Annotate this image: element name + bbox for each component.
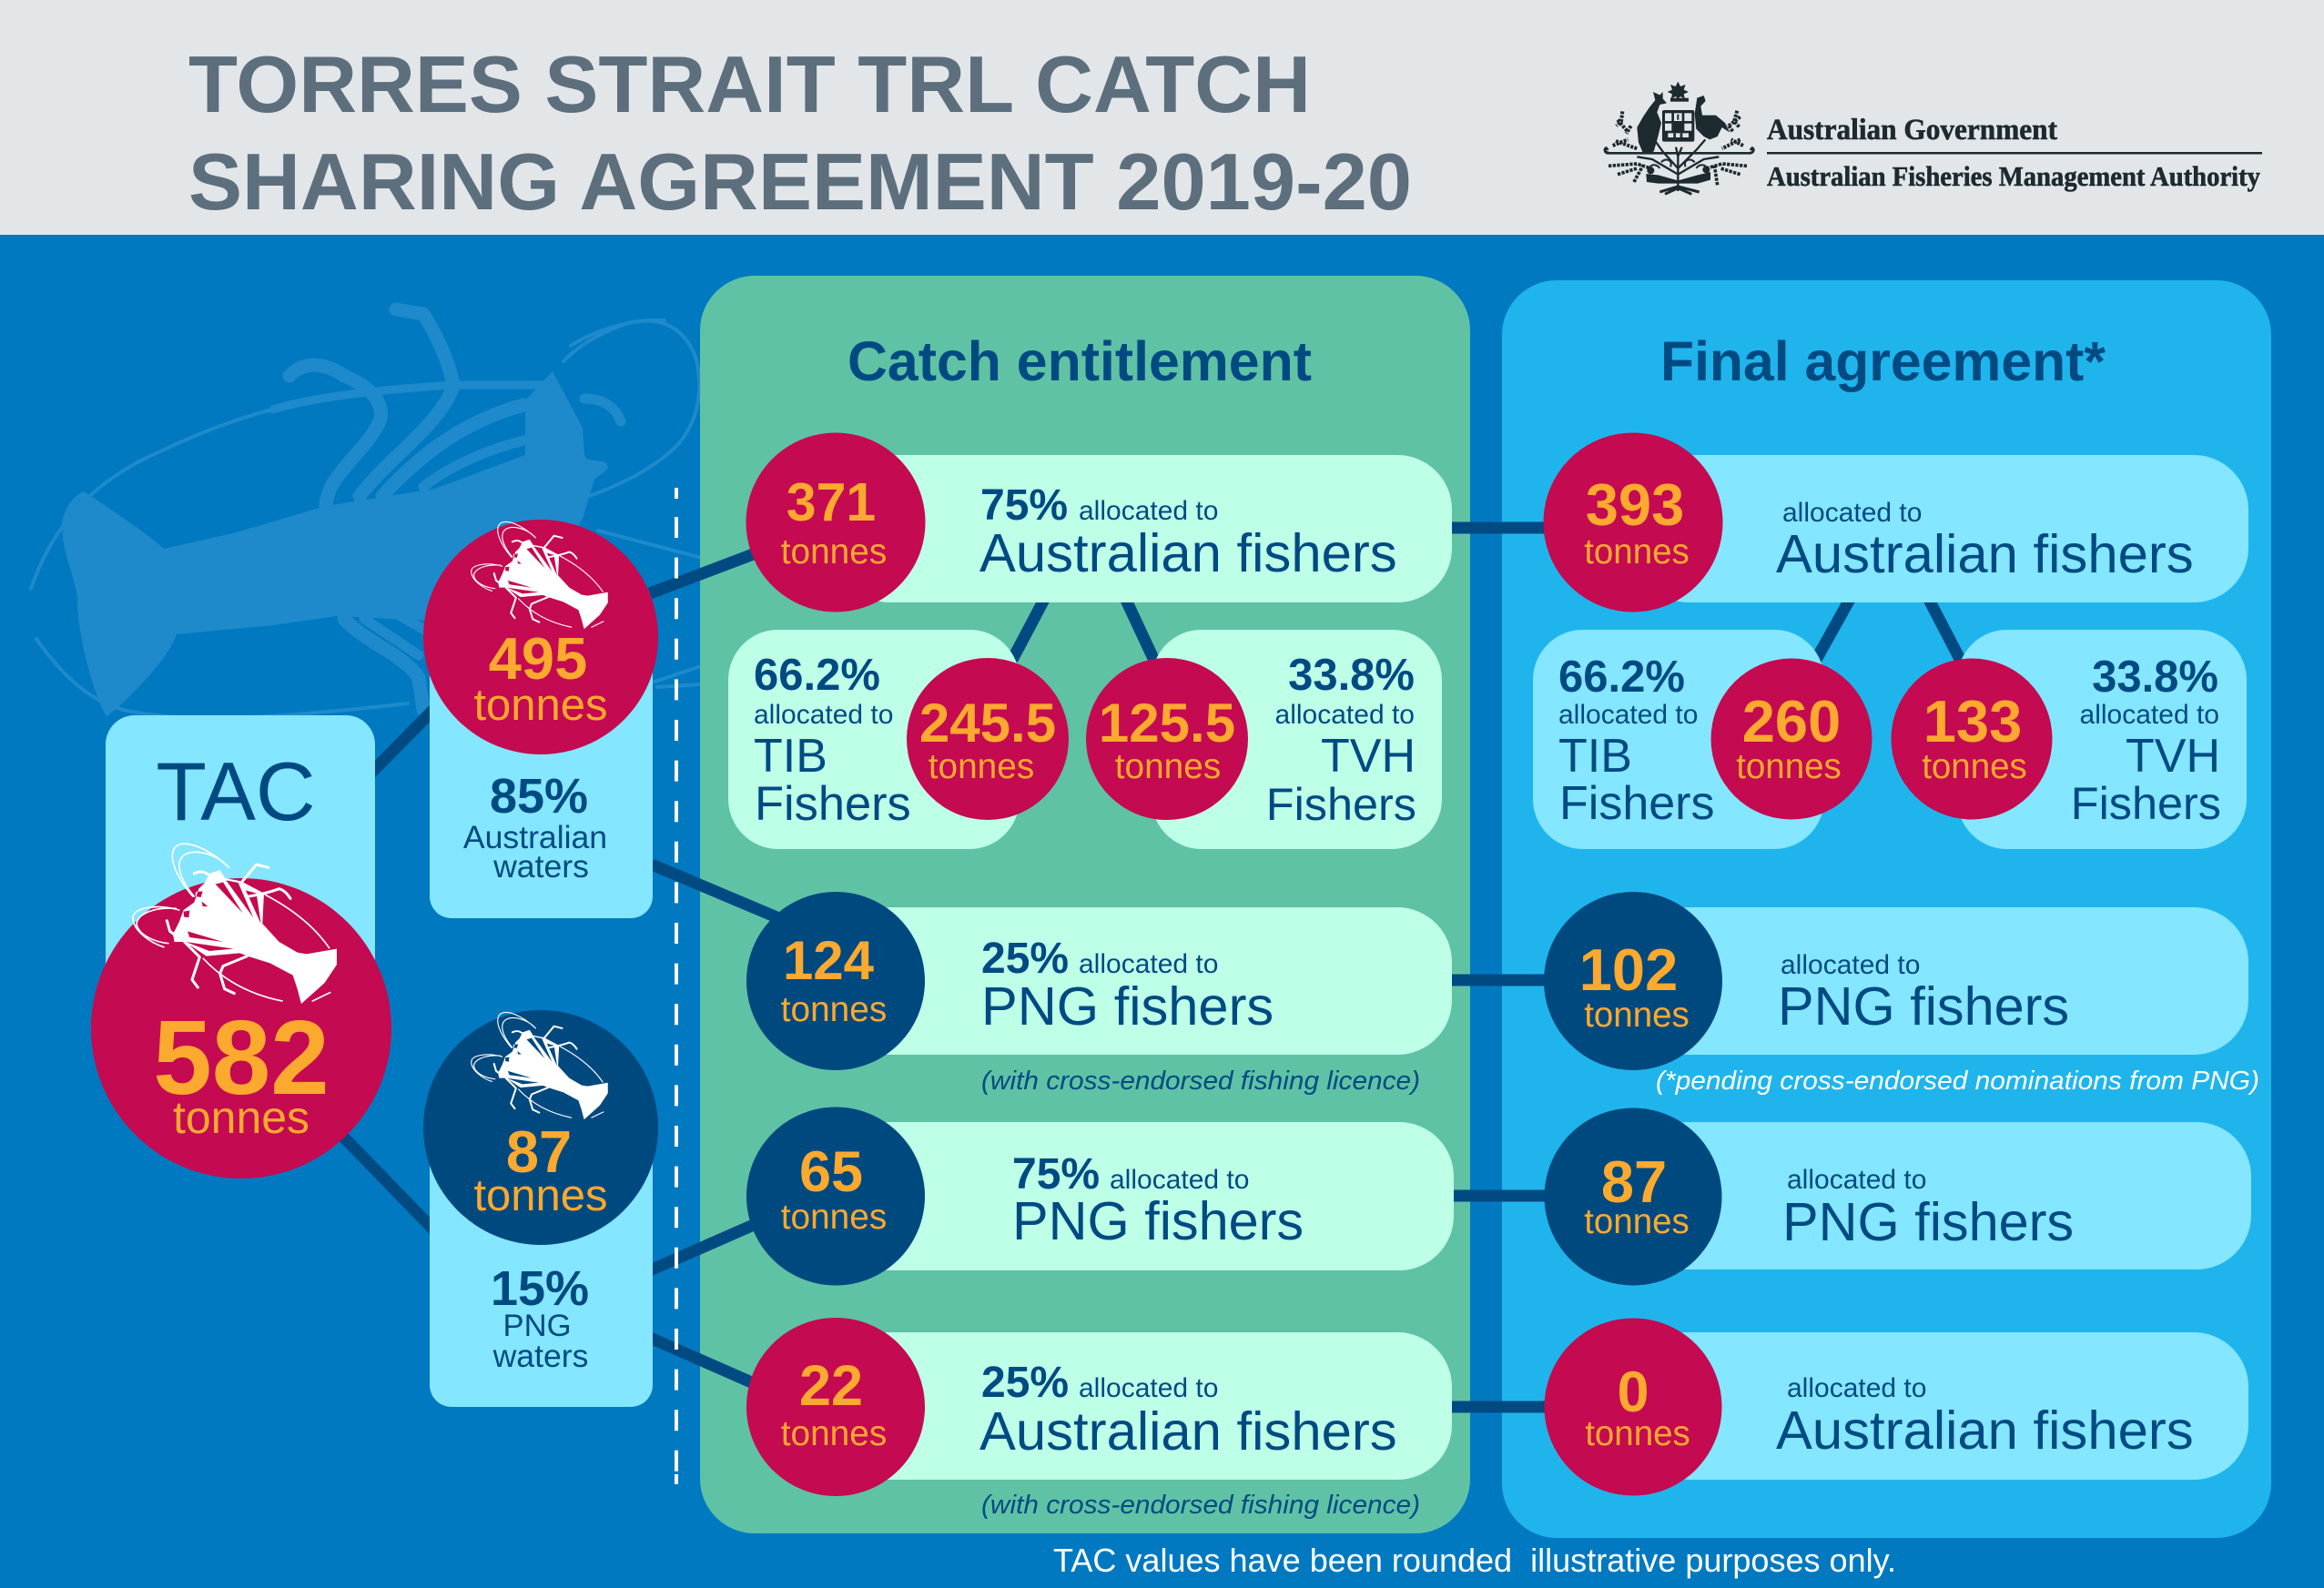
note: cross-endorsed licence: (with cross-endorsed fishing licence): [981, 1491, 1420, 1520]
share text: waters: [492, 1338, 588, 1374]
agency wordmark: Australian Government: [1767, 114, 2057, 147]
row: 124 tonnes PNG fishers: allocated to: [1079, 949, 1218, 979]
circle: 87 tonnes: [423, 1010, 658, 1245]
note: cross-endorsed licence: (with cross-endorsed fishing licence): [981, 1067, 1420, 1096]
sub-panel: TIB fishers (final agreement): allocated to: [1558, 700, 1698, 730]
agency wordmark: [1767, 114, 2262, 192]
row: 87 tonnes PNG fishers: PNG fishers: [1782, 1191, 2074, 1252]
panel: catch entitlement: [700, 276, 1470, 1533]
sub-panel: TIB fishers (final agreement): tonnes: [1736, 747, 1842, 786]
circle: 582 tonnes: 582: [153, 998, 330, 1117]
share text: PNG: [503, 1309, 571, 1343]
sub-panel: TIB fishers (final agreement): TIB: [1558, 730, 1632, 783]
share text: Australian: [463, 819, 607, 855]
sub-panel: TVH fishers (final agreement): 133: [1923, 688, 2022, 754]
sub-panel: TVH fishers (final agreement): allocated to: [2080, 700, 2219, 730]
TAC label: TAC: [156, 746, 316, 838]
row: 65 tonnes PNG fishers: allocated to: [1110, 1165, 1249, 1195]
sub-panel: TVH fishers (catch entitlement): 33.8%: [1288, 651, 1415, 700]
row: 393 tonnes Australian fishers: 393: [1586, 471, 1684, 538]
sub-panel: TVH fishers (catch entitlement): tonnes: [1115, 747, 1221, 786]
row: 65 tonnes PNG fishers: 65: [799, 1140, 863, 1204]
row: 87 tonnes PNG fishers: 87: [1601, 1148, 1667, 1215]
circle: 582 tonnes: [91, 844, 391, 1178]
row: 87 tonnes PNG fishers: allocated to: [1787, 1165, 1926, 1195]
row: 22 tonnes Australian fishers: allocated to: [1079, 1373, 1218, 1403]
title: SHARING AGREEMENT 2019-20: [188, 137, 1412, 227]
row: 65 tonnes PNG fishers: [746, 1107, 1454, 1285]
Australian waters box: [423, 520, 658, 918]
sub-panel: TVH fishers (final agreement): tonnes: [1922, 747, 2027, 786]
circle: 495 tonnes: 495: [489, 625, 587, 692]
row: 102 tonnes PNG fishers: 102: [1579, 936, 1678, 1003]
row: 124 tonnes PNG fishers: tonnes: [781, 990, 887, 1029]
panel: final agreement: [1502, 280, 2271, 1538]
heading: final agreement: Final agreement*: [1660, 330, 2106, 392]
sub-panel: TVH fishers (catch entitlement): Fishers: [1266, 778, 1416, 830]
share text: 15%: [491, 1261, 589, 1316]
row: 22 tonnes Australian fishers: tonnes: [781, 1414, 887, 1453]
circle: 495 tonnes: tonnes: [473, 681, 608, 730]
background lobster silhouette: [31, 309, 706, 718]
sub-panel: TIB fishers (catch entitlement): tonnes: [929, 747, 1034, 786]
icon: lobster: [133, 844, 337, 1004]
title: [188, 39, 1412, 227]
note: pending nominations: (*pending cross-endorsed nominations from PNG): [1656, 1067, 2259, 1096]
sub-panel: TVH fishers (catch entitlement): allocated to: [1275, 700, 1415, 730]
sub-panel: TIB fishers (catch entitlement): 245.5: [919, 693, 1056, 754]
row: 65 tonnes PNG fishers: PNG fishers: [1012, 1190, 1304, 1251]
row: 371 tonnes Australian fishers: 371: [787, 472, 876, 532]
row: 102 tonnes PNG fishers: tonnes: [1584, 996, 1690, 1035]
row: 0 tonnes Australian fishers: Australian fishers: [1776, 1400, 2194, 1461]
share text: waters: [492, 848, 589, 885]
PNG waters box: [423, 1010, 658, 1407]
dashed divider: [675, 488, 678, 1484]
row: 393 tonnes Australian fishers: allocated to: [1782, 498, 1922, 528]
sub-panel: TIB fishers (final agreement): 260: [1742, 688, 1841, 754]
sub-panel: TIB fishers (final agreement): 66.2%: [1558, 652, 1685, 702]
row: 87 tonnes PNG fishers: tonnes: [1584, 1202, 1690, 1241]
share text: 85%: [490, 769, 588, 824]
row: 124 tonnes PNG fishers: 124: [783, 930, 875, 991]
sub-panel: TIB fishers (catch entitlement): 66.2%: [754, 651, 880, 700]
row: 102 tonnes PNG fishers: PNG fishers: [1778, 976, 2069, 1037]
share text: [491, 1261, 589, 1374]
row: 0 tonnes Australian fishers: tonnes: [1585, 1414, 1690, 1453]
icon: lobster small: [472, 521, 608, 629]
row: 0 tonnes Australian fishers: [1544, 1318, 2248, 1496]
footnote: TAC values have been rounded illustrative purposes only.: [1053, 1542, 1896, 1579]
sub-panel: TIB fishers (catch entitlement): allocated to: [754, 700, 893, 730]
row: 22 tonnes Australian fishers: Australian fishers: [979, 1401, 1397, 1462]
row: 124 tonnes PNG fishers: PNG fishers: [981, 976, 1274, 1037]
sub-panel: TVH fishers (final agreement): TVH: [2126, 730, 2220, 783]
row: 22 tonnes Australian fishers: 22: [799, 1354, 863, 1418]
sub-panel: TIB fishers (catch entitlement): [728, 630, 1069, 849]
circle: 495 tonnes: [423, 520, 658, 754]
row: 124 tonnes PNG fishers: 25%: [981, 935, 1069, 983]
row: 22 tonnes Australian fishers: 25%: [981, 1359, 1069, 1407]
row: 65 tonnes PNG fishers: 75%: [1012, 1150, 1100, 1199]
circle: 87 tonnes: tonnes: [473, 1171, 608, 1220]
sub-panel: TVH fishers (final agreement): 33.8%: [2092, 652, 2218, 702]
icon: Australian coat of arms: [1604, 82, 1755, 194]
sub-panel: TVH fishers (catch entitlement): TVH: [1321, 730, 1416, 783]
sub-panel: TIB fishers (catch entitlement): Fishers: [755, 778, 911, 831]
sub-panel: TIB fishers (catch entitlement): TIB: [754, 730, 827, 783]
row: 393 tonnes Australian fishers: Australian fishers: [1776, 523, 2194, 584]
row: 0 tonnes Australian fishers: 0: [1617, 1360, 1649, 1424]
share text: [463, 769, 607, 885]
row: 393 tonnes Australian fishers: [1544, 433, 2248, 612]
row: 371 tonnes Australian fishers: tonnes: [781, 532, 887, 571]
connector lines: [343, 528, 1963, 1407]
row: 371 tonnes Australian fishers: Australian fishers: [979, 522, 1397, 583]
header band: [0, 0, 2324, 235]
heading: catch entitlement: Catch entitlement: [847, 330, 1312, 392]
sub-panel: TIB fishers (final agreement): Fishers: [1559, 777, 1714, 830]
circle: 87 tonnes: 87: [506, 1118, 572, 1185]
row: 102 tonnes PNG fishers: allocated to: [1781, 950, 1920, 980]
sub-panel: TVH fishers (final agreement): [1892, 630, 2247, 849]
icon: lobster small: [472, 1012, 608, 1119]
sub-panel: TVH fishers (catch entitlement): [1086, 630, 1442, 849]
sub-panel: TVH fishers (catch entitlement): 125.5: [1099, 693, 1235, 754]
TAC total box: [91, 715, 391, 1178]
row: 371 tonnes Australian fishers: [746, 433, 1452, 612]
circle: 582 tonnes: tonnes: [173, 1092, 310, 1143]
sub-panel: TIB fishers (final agreement): [1533, 630, 1872, 849]
row: 371 tonnes Australian fishers: 75%: [980, 481, 1068, 530]
row: 124 tonnes PNG fishers: [746, 892, 1452, 1070]
row: 87 tonnes PNG fishers: [1544, 1108, 2251, 1285]
title: TORRES STRAIT TRL CATCH: [188, 39, 1311, 129]
row: 371 tonnes Australian fishers: allocated to: [1079, 496, 1218, 526]
row: 22 tonnes Australian fishers: [746, 1318, 1452, 1496]
sub-panel: TVH fishers (final agreement): Fishers: [2071, 777, 2221, 829]
row: 65 tonnes PNG fishers: tonnes: [781, 1198, 887, 1237]
row: 393 tonnes Australian fishers: tonnes: [1584, 532, 1690, 571]
row: 0 tonnes Australian fishers: allocated to: [1787, 1373, 1926, 1403]
row: 102 tonnes PNG fishers: [1544, 892, 2248, 1070]
agency wordmark: Australian Fisheries Management Authority: [1767, 160, 2260, 192]
